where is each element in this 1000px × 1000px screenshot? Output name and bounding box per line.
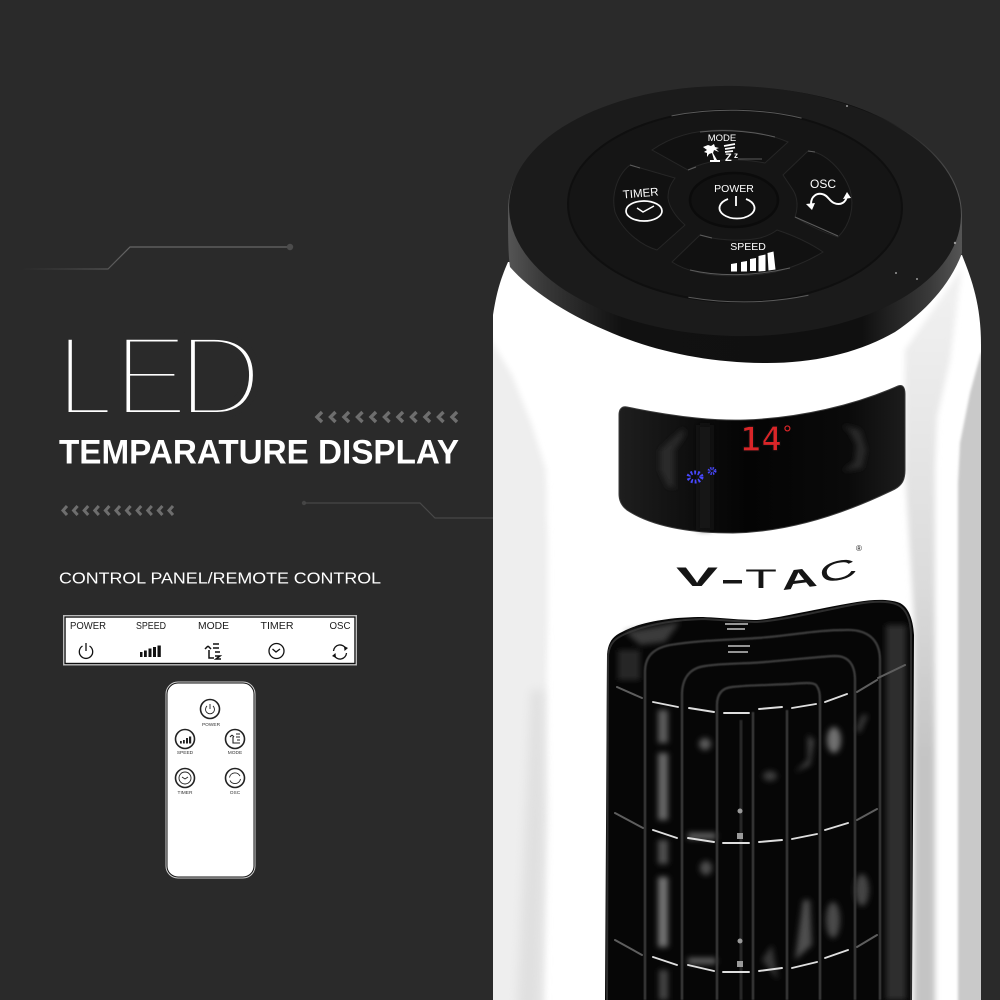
strip labels: SPEED [136, 621, 166, 632]
remote labels: MODE [228, 750, 242, 756]
remote labels: SPEED [177, 750, 194, 756]
button: mode [652, 130, 788, 170]
grille inner rim [607, 602, 911, 1000]
grille rib highlights [653, 694, 848, 972]
remote labels: OSC [230, 790, 241, 796]
panel: control panel strip [64, 616, 356, 665]
strip icons [79, 643, 347, 659]
decorative chevrons upper [317, 412, 457, 422]
remote buttons [176, 700, 244, 788]
product: top control cap [506, 80, 964, 363]
grille top gloss [725, 624, 750, 652]
logo: V-TAC [676, 544, 862, 596]
icon: oscillation arrows [811, 194, 847, 204]
body shading [485, 268, 990, 1000]
decorative chevrons lower [63, 506, 173, 515]
heading: LED [57, 312, 262, 440]
heading: LED: E [114, 312, 188, 440]
product: fan grille [605, 600, 914, 1000]
cap inner ring [566, 107, 904, 305]
strip labels: MODE [198, 621, 229, 632]
button: timer: TIMER [622, 186, 659, 202]
heading: LED: D [178, 312, 262, 440]
product: display window [619, 385, 905, 533]
product: display window: ° [783, 421, 792, 446]
subheading: temparature display: TEMPARATURE DISPLAY [59, 434, 459, 472]
decorative circuit line bottom [302, 501, 493, 518]
logo: V-TAC: A [779, 562, 819, 596]
button: mode: z [734, 151, 738, 160]
button: speed: SPEED [730, 241, 766, 253]
logo: V-TAC: V [676, 562, 718, 592]
display reflections [660, 425, 866, 530]
logo: V-TAC: T [745, 564, 777, 594]
button: power [690, 173, 778, 227]
logo: V-TAC: ® [856, 544, 862, 553]
icon: clock [626, 201, 662, 221]
cap specks [846, 105, 956, 280]
button: power: POWER [714, 183, 754, 195]
product: tower fan body [485, 255, 990, 1000]
cap rim [508, 87, 962, 363]
icon: palm and zz [703, 144, 720, 162]
blurred blade reflections [618, 622, 906, 1000]
decorative circuit line top [20, 244, 293, 269]
button: osc [783, 151, 852, 237]
temperature readout: 14 [740, 420, 782, 460]
grille frames [645, 630, 880, 1000]
button edge highlights [630, 131, 838, 275]
strip labels: TIMER [260, 621, 294, 632]
button: mode: MODE [708, 133, 736, 144]
remote labels [177, 722, 242, 796]
button: osc: OSC [810, 177, 836, 191]
strip labels [70, 621, 350, 632]
strip labels: OSC [330, 621, 350, 632]
icon: power [719, 196, 754, 219]
panel: remote control [166, 682, 255, 878]
icon: speed bars [731, 252, 776, 272]
strip labels: POWER [70, 621, 106, 632]
grille dim rib segments [615, 665, 905, 955]
remote labels: TIMER [178, 790, 193, 796]
button: speed [672, 230, 823, 276]
button: timer [614, 165, 685, 250]
button: mode: Z [725, 152, 732, 164]
remote button icons [179, 704, 240, 784]
logo: V-TAC: C [816, 552, 860, 590]
cap top face [506, 80, 964, 342]
caption: control panel / remote control: CONTROL PANEL/REMOTE CONTROL [59, 570, 381, 588]
remote labels: POWER [202, 722, 221, 728]
heading: LED: L [57, 312, 114, 440]
icon: fan speed indicators [688, 468, 715, 482]
